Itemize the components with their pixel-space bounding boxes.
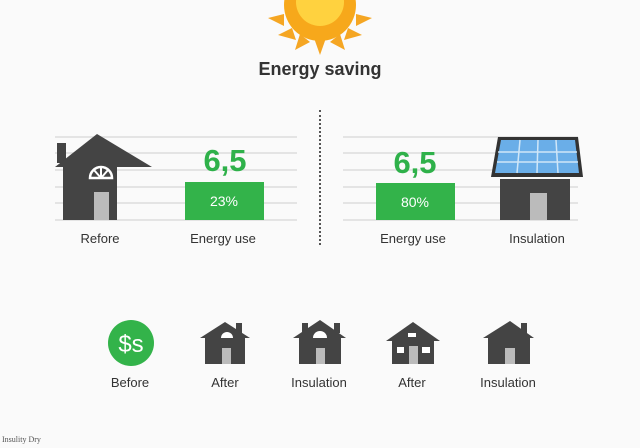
label: After 2: After (398, 375, 426, 390)
divider (319, 110, 321, 245)
icon: sun (268, 0, 372, 55)
icon: house before (55, 134, 152, 220)
label: Refore: Refore (80, 231, 120, 246)
icon: dollar circle: $s (118, 331, 144, 358)
bar: 23%: 23% (210, 193, 238, 209)
icon: house after 2 (386, 322, 440, 364)
icon: dollar circle (108, 320, 154, 366)
value left: 6,5 (203, 143, 247, 178)
label: Energy use right: Energy use (380, 231, 446, 246)
label: After 1: After (211, 375, 239, 390)
title: Energy saving (258, 59, 382, 79)
bar: 80%: 80% (401, 194, 429, 210)
icon: house insulation 1 (293, 320, 346, 364)
footer text: Insulity Dry (2, 435, 41, 444)
label: Energy use left: Energy use (190, 231, 256, 246)
label: Before: Before (111, 375, 149, 390)
icon: solar house (491, 137, 583, 220)
label: Insulation right: Insulation (509, 231, 565, 246)
label: Insulation 1: Insulation (291, 375, 347, 390)
bar: 23% (185, 182, 264, 220)
label: Insulation 2: Insulation (480, 375, 536, 390)
bar: 80% (376, 183, 455, 220)
icon: house insulation 2 (483, 321, 534, 364)
icon: house after 1 (200, 322, 250, 364)
value right: 6,5 (393, 145, 437, 180)
